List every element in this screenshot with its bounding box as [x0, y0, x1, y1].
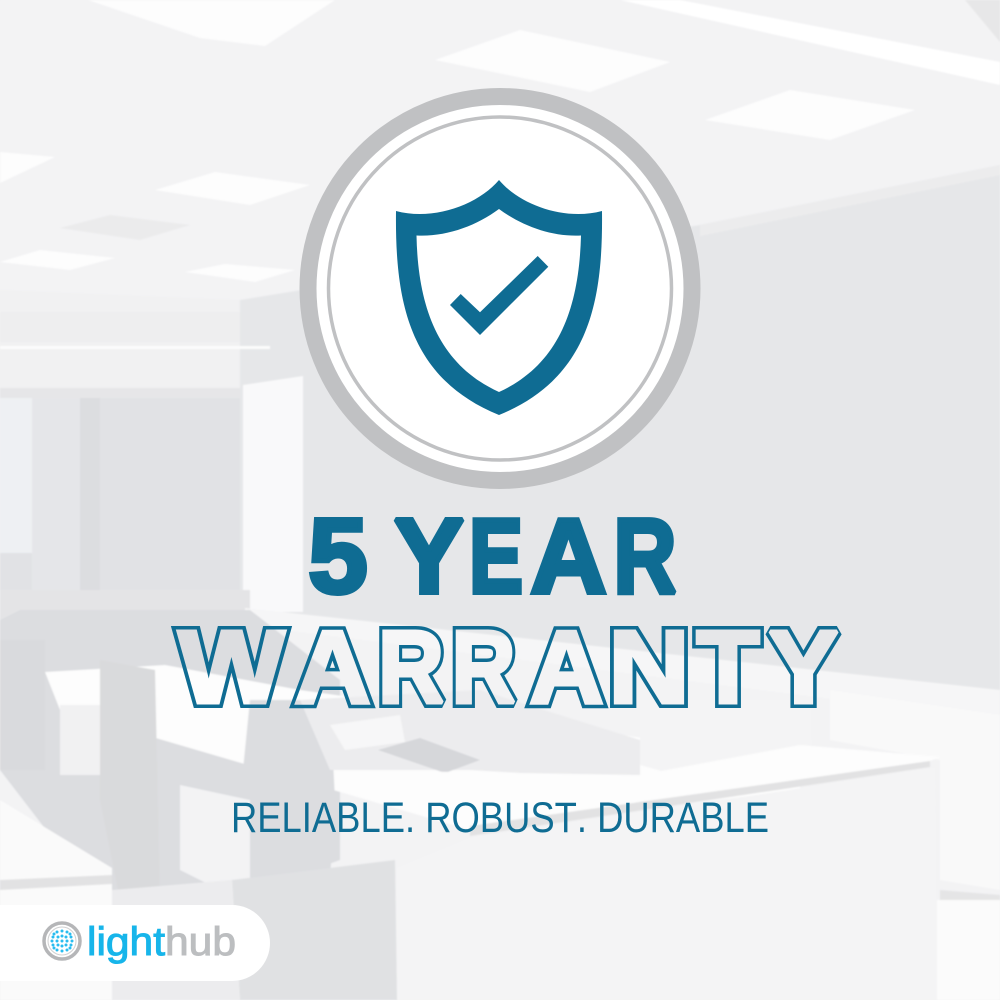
heading: WARRANTY outlined: W [178, 610, 285, 724]
heading: WARRANTY outlined: Y [768, 610, 838, 724]
logo wordmark: lighthub [87, 920, 236, 964]
heading: WARRANTY outlined: R [378, 610, 444, 724]
outer grey ring [308, 96, 692, 480]
badge: shield emblem in ringed circle [308, 96, 692, 480]
heading: 5 YEAR: 5 [308, 498, 368, 616]
logo: lighthub pill [0, 905, 270, 981]
heading: WARRANTY outlined: R [452, 610, 516, 724]
heading: 5 YEAR: Y [394, 498, 464, 616]
heading: 5 YEAR [308, 498, 676, 616]
icon: lighthub lens [44, 923, 80, 959]
heading: WARRANTY outlined: T [696, 610, 760, 724]
heading: WARRANTY outlined: A [294, 610, 370, 724]
heading: WARRANTY outlined [170, 626, 842, 708]
logo background pill [0, 905, 270, 981]
heading: WARRANTY outlined: A [530, 610, 604, 724]
heading: 5 YEAR: A [530, 498, 606, 616]
inner thin ring [328, 117, 672, 460]
heading: 5 YEAR: E [469, 498, 523, 616]
tagline: RELIABLE. ROBUST. DURABLE [231, 794, 769, 842]
heading: 5 YEAR: R [614, 498, 676, 616]
icon: shield with check mark [396, 180, 602, 415]
heading: WARRANTY outlined: N [608, 610, 690, 724]
